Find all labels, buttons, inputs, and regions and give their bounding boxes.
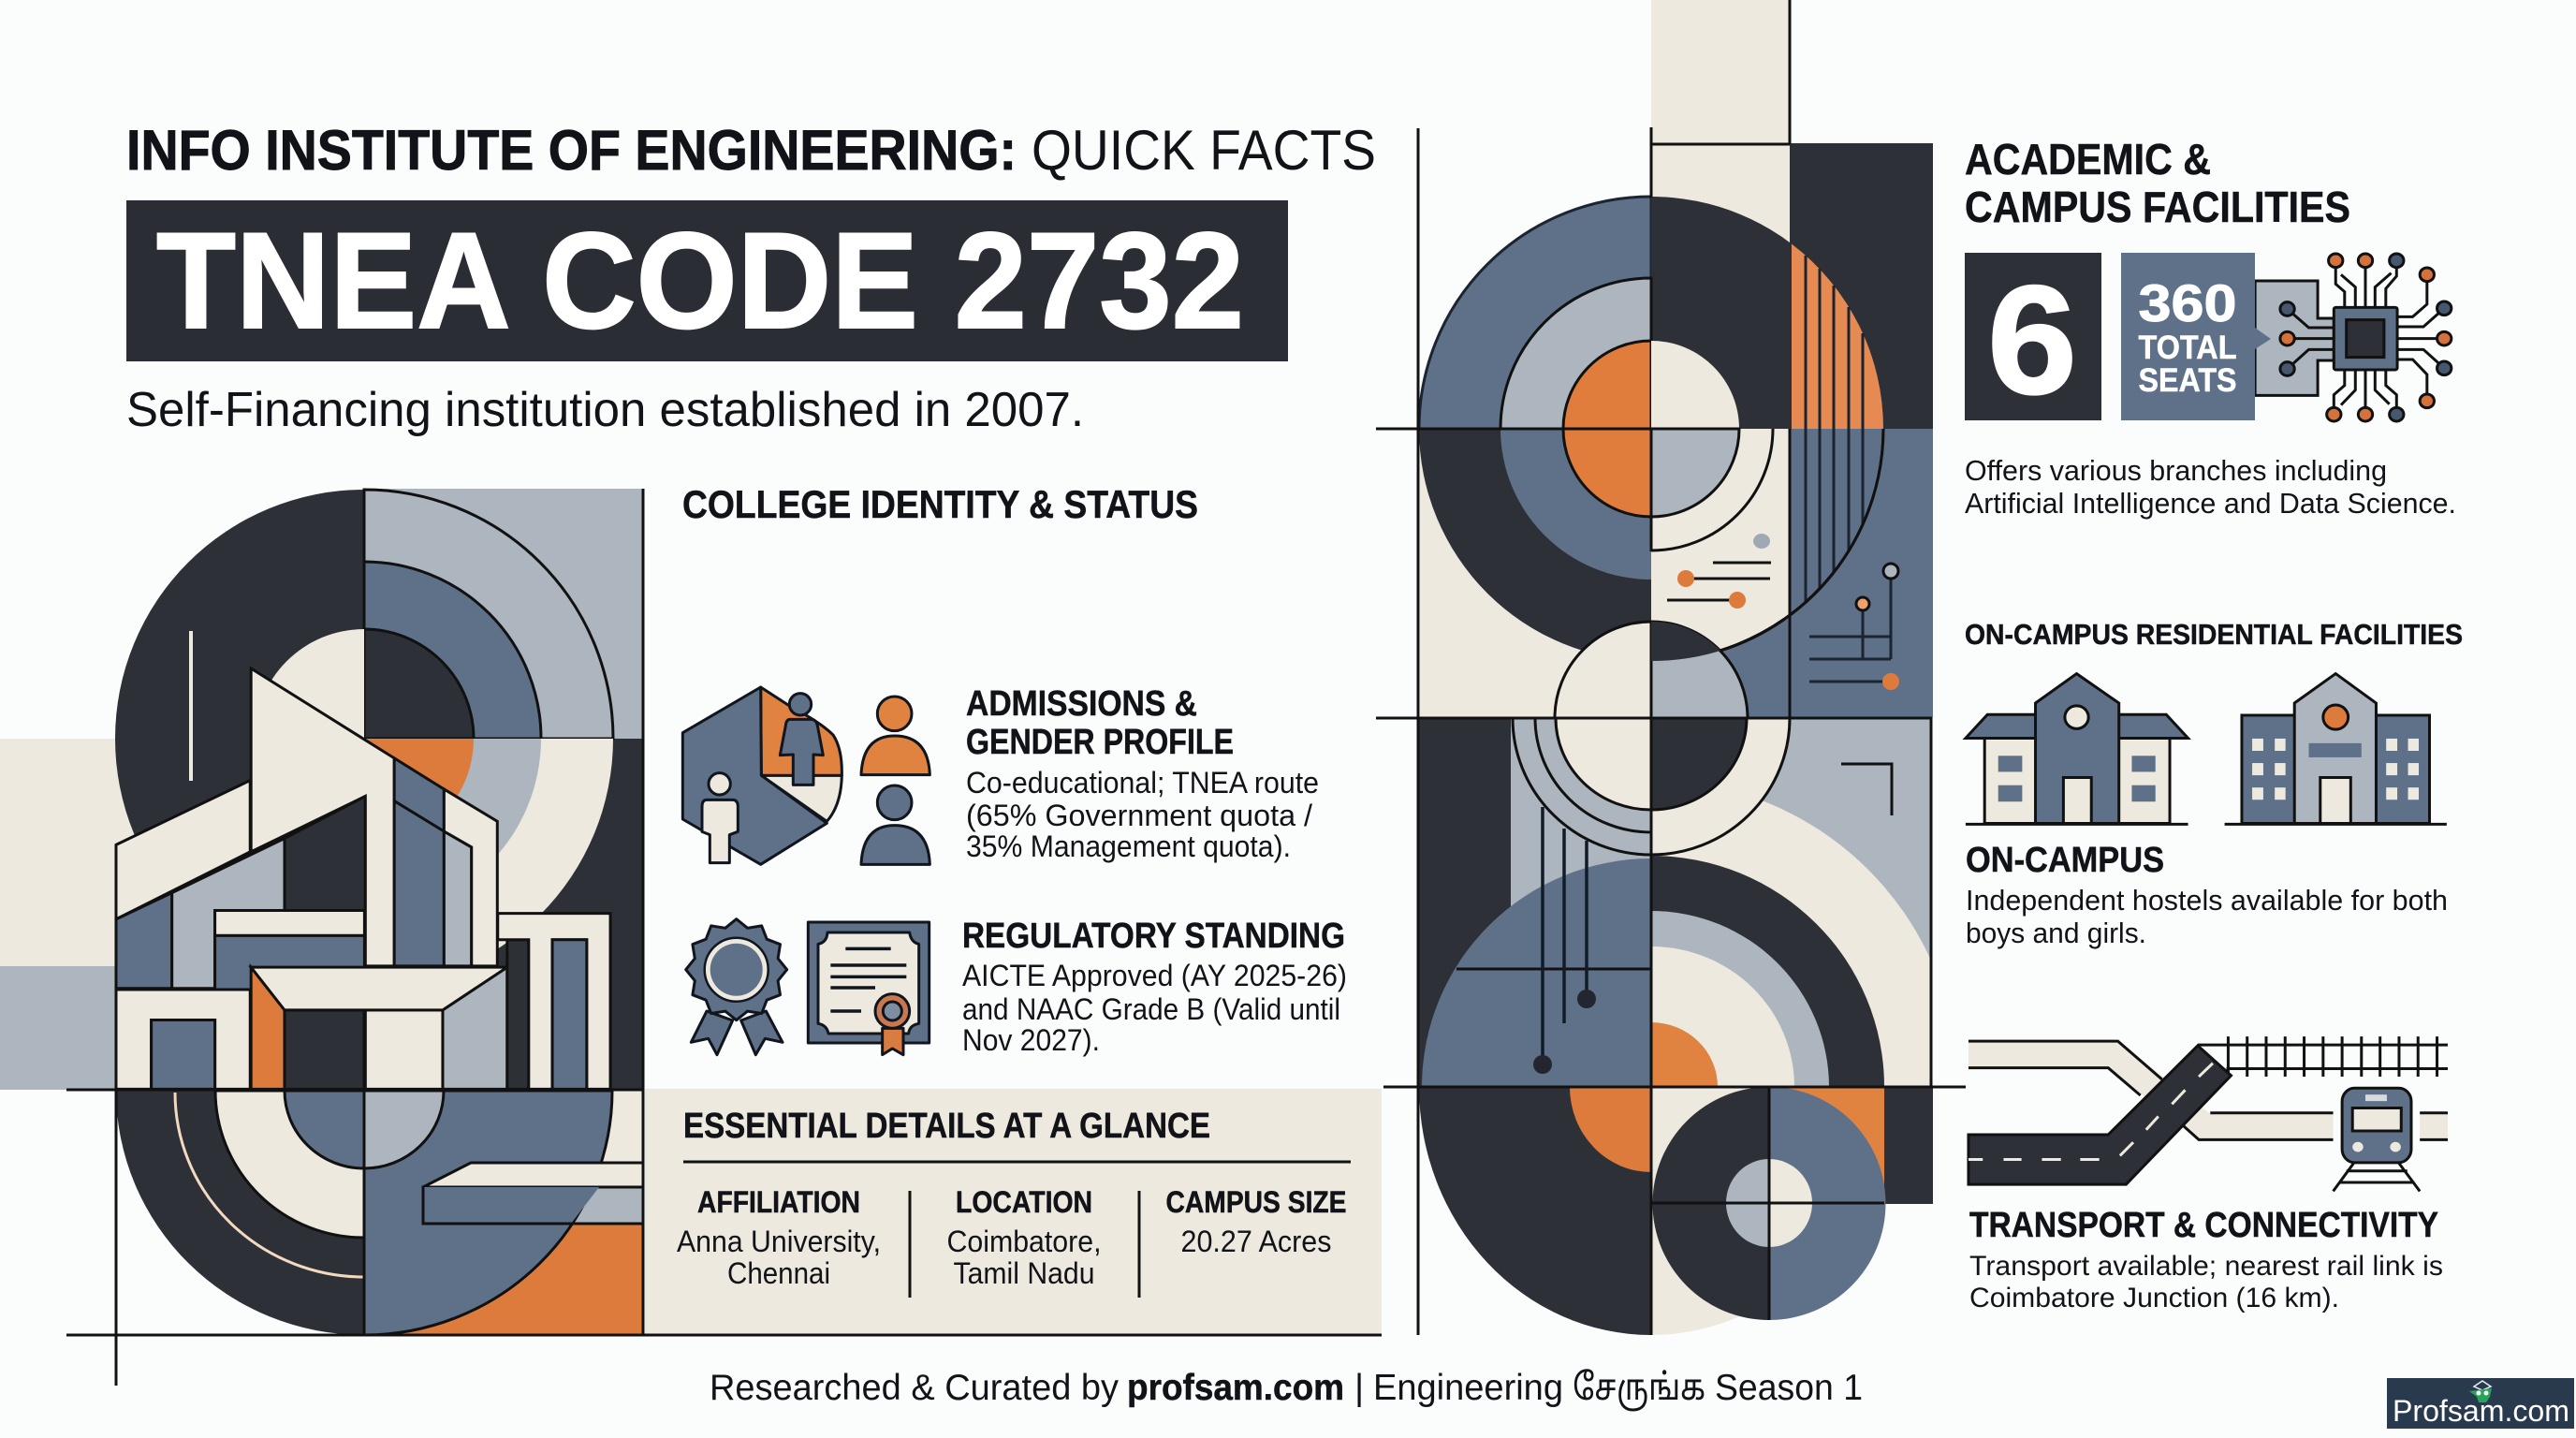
right geometric artwork xyxy=(1376,0,1966,1335)
heading: academic facilities xyxy=(1965,135,2350,231)
footer credit: Researched & Curated by xyxy=(710,1368,1119,1408)
logo: Profsam: Profsam.com xyxy=(2393,1394,2569,1428)
title: QUICK FACTS xyxy=(1032,119,1376,182)
heading: academic facilities: CAMPUS FACILITIES xyxy=(1965,183,2350,231)
column: campus size xyxy=(1166,1185,1346,1258)
text: regulatory: and NAAC Grade B (Valid until xyxy=(962,992,1340,1026)
text: admissions: (65% Government quota / xyxy=(966,799,1312,832)
footer credit xyxy=(710,1368,1863,1412)
column: location: Coimbatore, xyxy=(947,1225,1101,1258)
stat: 360 total seats: SEATS xyxy=(2138,362,2237,399)
icon: mascot xyxy=(2469,1381,2492,1402)
panel: essential details xyxy=(643,1089,1382,1335)
footer credit: சேருங்க xyxy=(1573,1368,1705,1412)
text: transport: Coimbatore Junction (16 km). xyxy=(1969,1283,2339,1313)
icon: road and rail xyxy=(1969,1036,2448,1191)
stat: 6 xyxy=(1965,253,2101,426)
text: admissions: Co-educational; TNEA route xyxy=(966,766,1319,800)
text: admissions: 35% Management quota). xyxy=(966,829,1291,863)
icon: medal xyxy=(686,919,787,1055)
logo: Profsam xyxy=(2387,1378,2574,1429)
text: regulatory: Nov 2027). xyxy=(962,1023,1100,1057)
data dots and lines xyxy=(1667,534,1899,690)
subtitle: Self-Financing institution established in 2007. xyxy=(126,383,1084,437)
text: admissions: GENDER PROFILE xyxy=(966,723,1234,762)
column: affiliation: Chennai xyxy=(727,1256,830,1290)
column: affiliation: AFFILIATION xyxy=(697,1185,860,1219)
text: admissions xyxy=(966,684,1319,863)
stat: 360 total seats xyxy=(2121,253,2271,420)
column: location xyxy=(947,1185,1101,1290)
text: branches: Artificial Intelligence and Data Science. xyxy=(1965,487,2456,520)
stat: 360 total seats: TOTAL xyxy=(2138,330,2237,366)
column: affiliation xyxy=(677,1185,881,1290)
footer credit: Engineering xyxy=(1373,1368,1563,1408)
column: affiliation: Anna University, xyxy=(677,1225,881,1258)
footer credit: | xyxy=(1354,1368,1364,1408)
heading: residential facilities: ON-CAMPUS RESIDENTIAL FACILITIES xyxy=(1965,618,2463,651)
footer credit: Season 1 xyxy=(1715,1368,1863,1408)
text: on-campus xyxy=(1966,841,2448,949)
text: regulatory xyxy=(962,917,1347,1057)
column: campus size: 20.27 Acres xyxy=(1181,1225,1331,1258)
icon: certificate xyxy=(808,922,929,1055)
icon: circuit chip xyxy=(2255,254,2452,421)
text: transport: Transport available; nearest rail link is xyxy=(1969,1251,2443,1282)
icon: hostel building two xyxy=(2225,674,2447,824)
footer credit: profsam.com xyxy=(1127,1368,1344,1408)
text: regulatory: AICTE Approved (AY 2025-26) xyxy=(962,959,1347,992)
small circle cap xyxy=(1555,622,1748,718)
building illustration xyxy=(116,668,610,1089)
icon: train xyxy=(2334,1088,2420,1191)
heading: academic facilities: ACADEMIC & xyxy=(1965,135,2211,183)
text: on-campus: boys and girls. xyxy=(1966,917,2146,949)
text: branches xyxy=(1965,454,2456,520)
column: location: Tamil Nadu xyxy=(953,1256,1095,1290)
text: on-campus: Independent hostels available for both xyxy=(1966,884,2448,917)
heading: college identity: COLLEGE IDENTITY & STATUS xyxy=(682,482,1198,526)
banner: TNEA code: TNEA CODE 2732 xyxy=(156,204,1244,357)
left geometric artwork xyxy=(0,489,1382,1386)
title: INFO INSTITUTE OF ENGINEERING: xyxy=(126,119,1017,182)
column: campus size: CAMPUS SIZE xyxy=(1166,1185,1346,1219)
stat: 6: 6 xyxy=(1987,254,2077,426)
text: on-campus: ON-CAMPUS xyxy=(1966,841,2164,880)
stat: 360 total seats: 360 xyxy=(2138,273,2237,332)
icon: hostel building one xyxy=(1966,674,2188,824)
text: branches: Offers various branches including xyxy=(1965,454,2387,487)
text: transport: TRANSPORT & CONNECTIVITY xyxy=(1969,1206,2438,1245)
column: location: LOCATION xyxy=(956,1185,1092,1219)
text: regulatory: REGULATORY STANDING xyxy=(962,917,1345,956)
icon: admissions people xyxy=(682,687,929,864)
text: transport xyxy=(1969,1206,2443,1313)
heading: essential details: ESSENTIAL DETAILS AT A GLANCE xyxy=(683,1107,1210,1146)
text: admissions: ADMISSIONS & xyxy=(966,684,1197,724)
